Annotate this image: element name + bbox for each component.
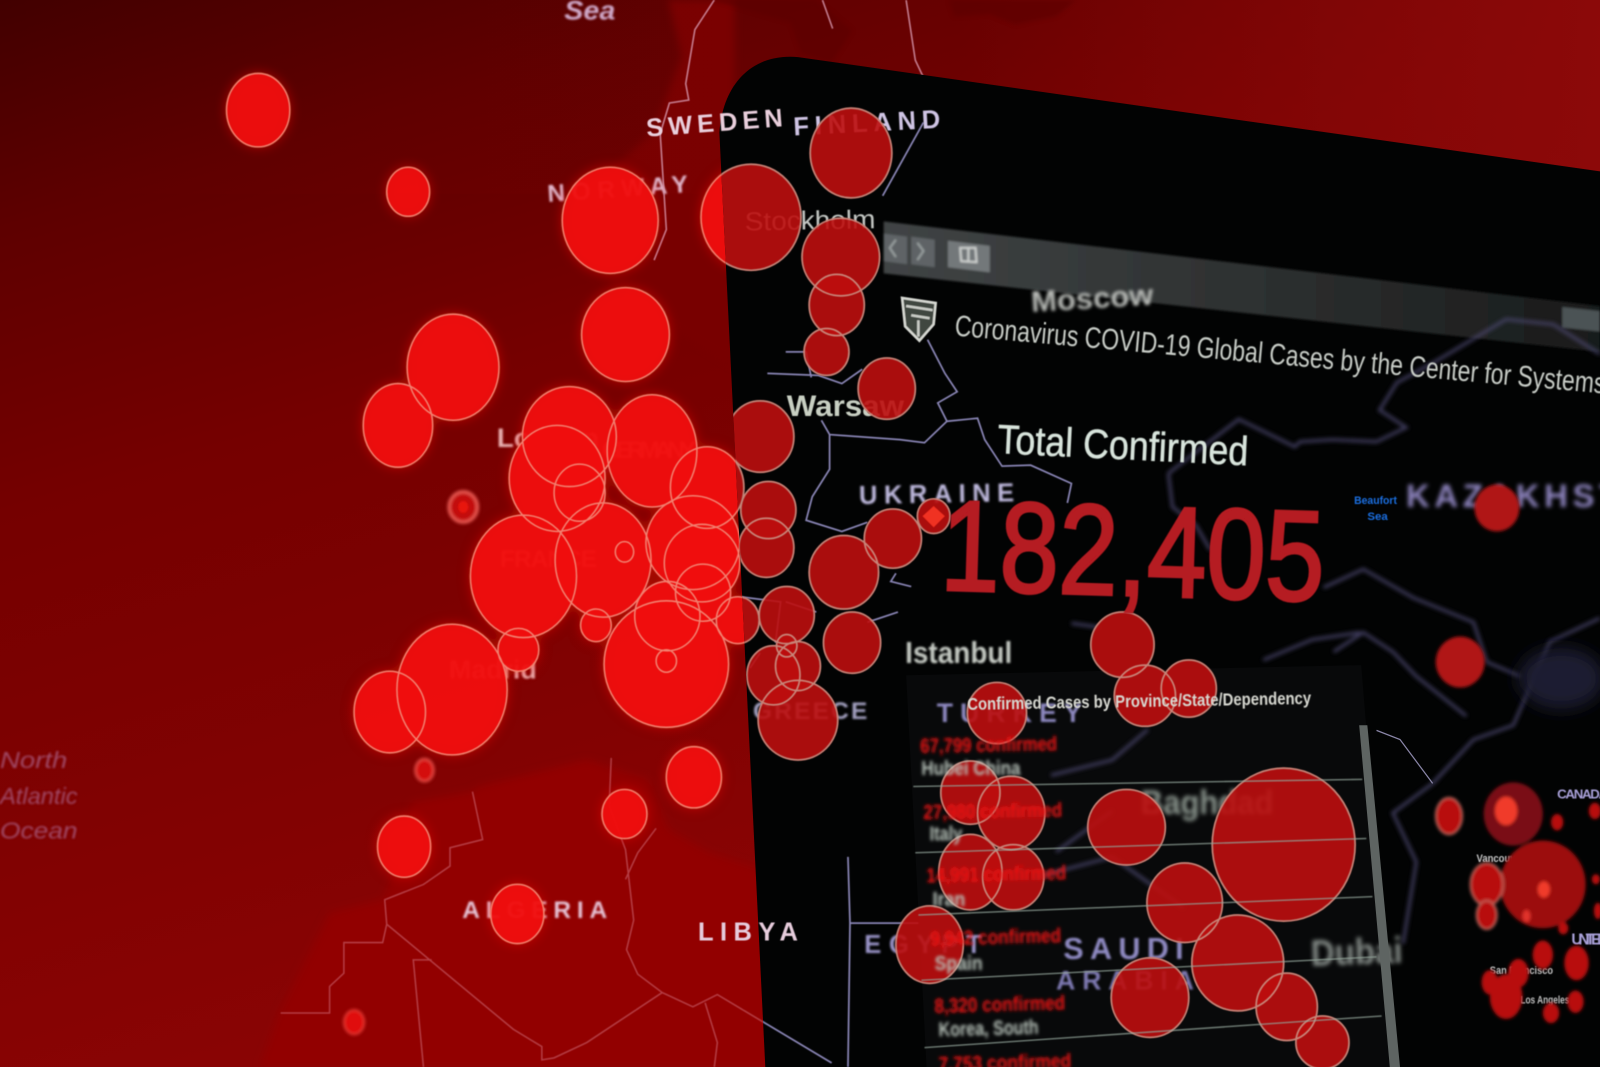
country borders on screen xyxy=(717,122,1071,1067)
map labels on the red area: NORWAY xyxy=(546,171,689,208)
map labels on screen: ARABIA xyxy=(1056,965,1194,995)
table row dividers xyxy=(913,779,1382,1048)
map labels on the red area: Ocean xyxy=(0,818,78,844)
map labels on screen: FINLAND xyxy=(793,106,941,142)
map labels on screen: SAUDI xyxy=(1063,932,1184,966)
country borders on the red area xyxy=(281,0,924,1067)
bubbles on the red area xyxy=(227,73,801,1034)
map labels on the red area xyxy=(0,0,696,924)
map labels on screen: Stockholm xyxy=(745,206,876,237)
table rows: 14,991 confirmed xyxy=(926,862,1066,887)
labels straddling the screen edge: SWEDEN xyxy=(645,104,784,143)
map labels on screen: Dubai xyxy=(1310,930,1403,974)
table rows xyxy=(920,733,1072,1067)
map labels on screen: TURKEY xyxy=(937,698,1082,728)
table panel xyxy=(906,665,1394,1067)
map labels on screen: Vancouver xyxy=(1477,853,1525,865)
map labels on the red area: Atlantic xyxy=(0,783,78,809)
map labels on screen: Sea xyxy=(1367,511,1389,523)
map labels on the red area: FRANCE xyxy=(500,546,597,573)
labels straddling the screen edge: LIBYA xyxy=(698,919,798,947)
table rows: 9,942 confirmed xyxy=(930,925,1061,951)
table rows: Hubei China xyxy=(921,758,1021,780)
browser toolbar xyxy=(884,221,1600,352)
map labels on screen: San Francisco xyxy=(1490,965,1553,977)
labels straddling the screen edge xyxy=(645,104,798,947)
table rows: 67,799 confirmed xyxy=(920,733,1057,758)
table rows: 27,980 confirmed xyxy=(923,800,1062,824)
map labels on screen: Baghdad xyxy=(1141,784,1273,822)
table scrollbar xyxy=(1359,725,1400,1067)
table rows: Spain xyxy=(935,953,983,975)
map labels on the red area: London xyxy=(497,423,599,453)
map labels on the red area: Paris xyxy=(554,484,605,509)
map labels on screen: EGYPT xyxy=(864,931,982,959)
blurred far-away borders on screen xyxy=(1036,319,1600,944)
map labels on screen: GREECE xyxy=(753,698,867,725)
map labels on screen: Moscow xyxy=(1030,279,1155,319)
map labels on the red area: North xyxy=(0,747,67,773)
screen contents xyxy=(670,106,1600,1067)
map labels on the red area: ALGERIA xyxy=(462,897,607,924)
table rows: 8,320 confirmed xyxy=(934,993,1065,1018)
table heading: Confirmed Cases by Province/State/Dependency xyxy=(967,688,1312,714)
map labels on screen: Istanbul xyxy=(905,636,1012,670)
total confirmed number: 182,405 xyxy=(939,475,1327,629)
icon: university shield xyxy=(902,298,936,341)
map labels on screen xyxy=(745,106,1600,1007)
confirmed cases table xyxy=(913,688,1400,1067)
map labels on screen: Warsaw xyxy=(787,390,905,423)
map labels on the red area: Madrid xyxy=(449,656,537,684)
blurred bubbles far right xyxy=(1436,485,1600,1023)
monitor screen xyxy=(719,57,1600,1067)
total confirmed heading: Total Confirmed xyxy=(996,416,1249,474)
map labels on the red area: GERMANY xyxy=(602,437,696,464)
table rows: Italy xyxy=(930,824,963,846)
map labels on screen: UKRAINE xyxy=(859,479,1014,510)
table rows: Iran xyxy=(933,889,965,911)
bubbles on screen xyxy=(670,108,1355,1067)
map labels on screen: Los Angeles xyxy=(1520,995,1569,1007)
map labels on screen: Beaufort xyxy=(1354,495,1397,507)
table rows: Korea, South xyxy=(938,1017,1039,1041)
